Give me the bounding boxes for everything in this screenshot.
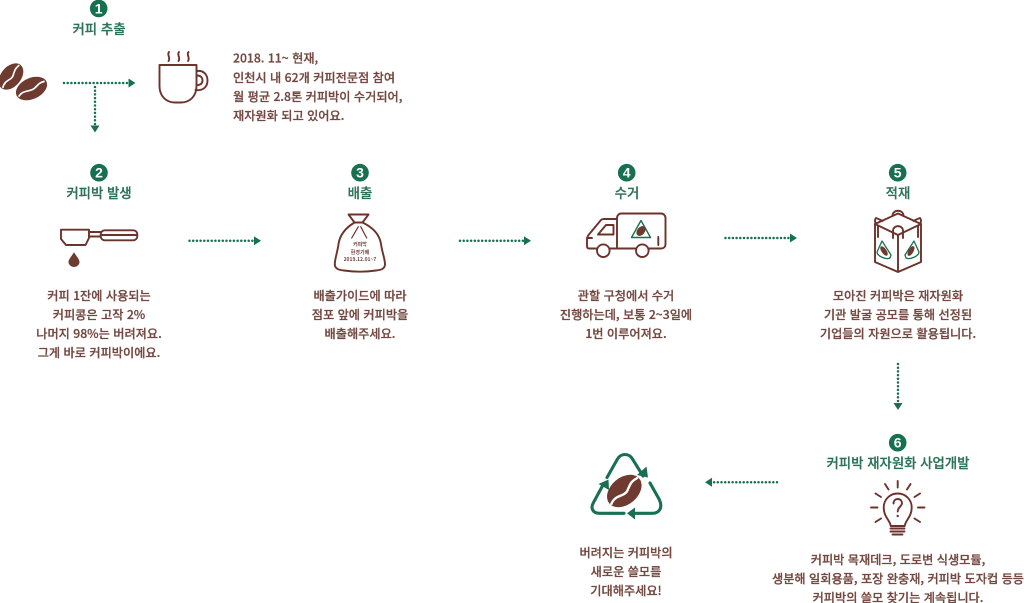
heading: loading: 적재 <box>886 182 910 202</box>
arrow: down to step 2 <box>90 87 100 132</box>
icon: coffee cup <box>160 52 208 102</box>
heading: grounds generated: 커피박 발생 <box>66 182 132 202</box>
text block: loading description: 기관 발굴 공모를 통해 선정된 <box>824 305 972 323</box>
heading: recycling business development: 커피박 재자원화 사업개발 <box>826 452 970 472</box>
arrow: step 3 to step 4 <box>460 236 531 245</box>
icon: grounds bag: 커피박 <box>353 241 367 248</box>
icon: light bulb with question mark <box>871 481 924 534</box>
text block: collection process: 1번 이루어져요. <box>585 324 667 342</box>
number badge 1: 1 <box>95 0 103 16</box>
text block: business description: 커피박 목재데크, 도로변 식생모듈, <box>811 550 985 568</box>
icon: grounds bag: 환경기배 <box>351 249 370 256</box>
text block: closing message: 버려지는 커피박의 <box>579 543 673 561</box>
text block: grounds description: 그게 바로 커피박이에요. <box>38 343 160 361</box>
step 5: loading <box>820 164 976 342</box>
closing: new uses for grounds <box>579 454 673 599</box>
text block: disposal guide: 점포 앞에 커피박을 <box>312 305 408 323</box>
number badge 6: 6 <box>894 435 902 451</box>
text block: loading description: 모아진 커피박은 재자원화 <box>833 286 963 304</box>
icon: grounds bag <box>335 214 385 272</box>
text block: collection summary: 재자원화 되고 있어요. <box>233 106 344 124</box>
icon: bulk bag <box>875 211 921 272</box>
step 4: collection <box>560 164 692 342</box>
text block: grounds description: 커피 1잔에 사용되는 <box>47 286 151 304</box>
step 3: disposal <box>312 164 408 342</box>
text block: disposal guide: 배출가이드에 따라 <box>313 286 407 304</box>
heading: coffee extraction: 커피 추출 <box>72 18 126 38</box>
text block: collection summary: 월 평균 2.8톤 커피박이 수거되어, <box>233 87 402 105</box>
text block: loading description <box>820 286 976 342</box>
step 6: recycling business <box>772 434 1024 603</box>
arrow: step 4 to step 5 <box>726 234 797 242</box>
icon: portafilter with drop <box>61 230 137 267</box>
icon: recycling symbol with coffee bean <box>592 454 661 520</box>
heading: disposal: 배출 <box>348 182 372 202</box>
text block: business description <box>772 550 1024 603</box>
icon: coffee beans <box>0 59 51 105</box>
text block: collection process <box>560 286 692 342</box>
icon: grounds bag: 2019.12.01~7 <box>344 256 376 263</box>
text block: grounds description: 커피콩은 고작 2% <box>53 305 145 323</box>
text block: collection summary <box>233 48 402 124</box>
icon: collection truck <box>587 214 666 257</box>
arrow: beans to cup <box>64 78 136 88</box>
text block: closing message <box>579 543 673 599</box>
text block: collection process: 관할 구청에서 수거 <box>578 286 674 304</box>
arrow: step 6 to recycling <box>705 478 777 487</box>
number badge 2: 2 <box>95 165 103 181</box>
text block: loading description: 기업들의 자원으로 활용됩니다. <box>820 324 976 342</box>
step 1: coffee extraction <box>0 0 402 133</box>
text block: closing message: 기대해주세요! <box>590 581 662 599</box>
arrow: step 2 to step 3 <box>190 236 261 245</box>
text block: collection summary: 2018. 11~ 현재, <box>233 48 318 66</box>
heading: collection: 수거 <box>615 182 639 202</box>
step 2: coffee grounds generated <box>36 164 162 361</box>
text block: disposal guide: 배출해주세요. <box>325 324 395 342</box>
number badge 5 <box>889 164 906 182</box>
text block: business description: 생분해 일회용품, 포장 완충재, 커피박 도자컵 등등 <box>772 569 1024 587</box>
number badge 5: 5 <box>894 165 902 181</box>
arrow: step 5 to step 6 <box>894 364 902 410</box>
number badge 2 <box>90 164 108 182</box>
text block: closing message: 새로운 쓸모를 <box>591 562 661 580</box>
number badge 6 <box>889 434 906 452</box>
text block: grounds description <box>36 286 162 361</box>
number badge 4 <box>618 164 636 182</box>
text block: collection summary: 인천시 내 62개 커피전문점 참여 <box>233 68 395 86</box>
number badge 1 <box>90 0 107 17</box>
number badge 4: 4 <box>623 165 631 181</box>
number badge 3 <box>351 164 369 182</box>
number badge 3: 3 <box>356 165 364 181</box>
text block: collection process: 진행하는데, 보통 2~3일에 <box>560 305 692 323</box>
text block: disposal guide <box>312 286 408 342</box>
text block: grounds description: 나머지 98%는 버려져요. <box>36 324 162 342</box>
